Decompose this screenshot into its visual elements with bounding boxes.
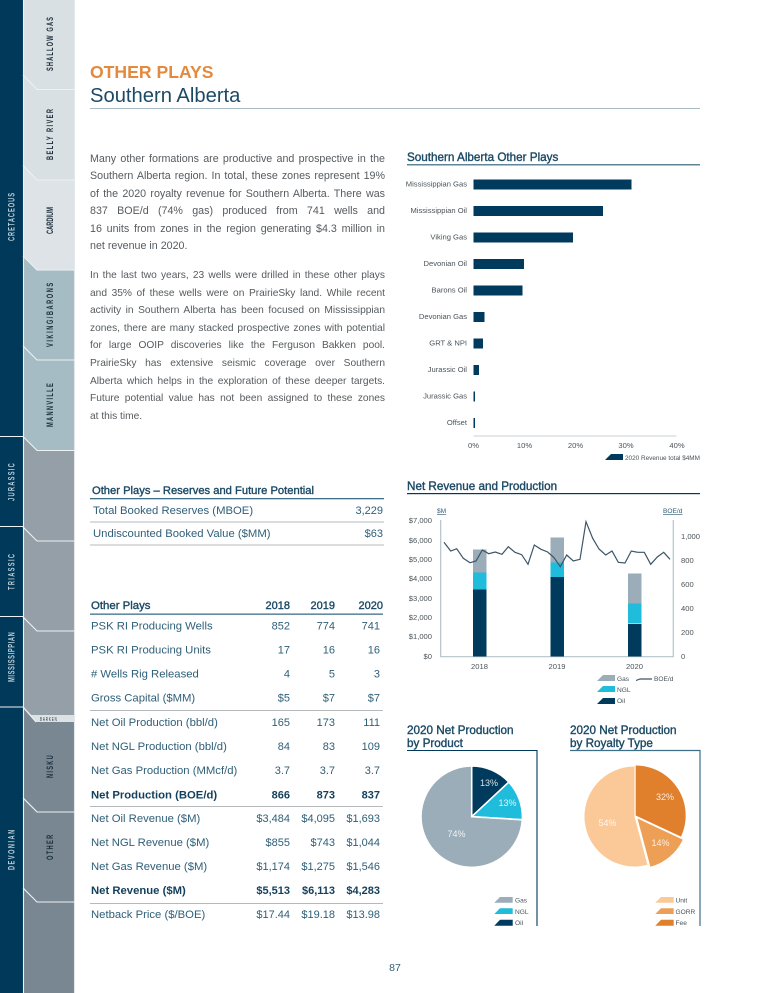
- table: Other Plays metrics 2018 to 2020: Netback Price ($/BOE): [91, 909, 205, 921]
- table: Other Plays metrics 2018 to 2020: 3: [374, 668, 380, 680]
- text block: drilling paragraph: [90, 270, 385, 422]
- combo chart: Net Revenue and Production: $2,000: [409, 613, 432, 622]
- table: Other Plays metrics 2018 to 2020: Net Gas Revenue ($M): [91, 861, 207, 873]
- table: Other Plays metrics 2018 to 2020: 83: [323, 741, 335, 753]
- combo chart: Net Revenue and Production: Oil: [617, 698, 626, 705]
- pie chart: 2020 Net Production by Royalty Type: Fee: [676, 920, 687, 927]
- table: Other Plays metrics 2018 to 2020: 837: [362, 790, 380, 802]
- combo chart: Net Revenue and Production: 400: [681, 604, 694, 613]
- pie chart: 2020 Net Production by Product: 2020 Net Production: [407, 724, 514, 737]
- table: Other Plays metrics 2018 to 2020: $5,513: [256, 885, 290, 897]
- table: Other Plays metrics 2018 to 2020: Net Gas Production (MMcf/d): [91, 765, 238, 777]
- table: Other Plays metrics 2018 to 2020: 173: [317, 717, 335, 729]
- title: Southern Alberta: [90, 85, 241, 107]
- pie chart: 2020 Net Production by Product: [407, 724, 537, 927]
- sidebar navigation: JURASSIC: [6, 463, 17, 501]
- bar chart: Southern Alberta Other Plays: 10%: [517, 441, 532, 450]
- bar chart: Southern Alberta Other Plays: Mississippian Gas: [406, 180, 467, 188]
- combo chart: Net Revenue and Production: 200: [681, 628, 694, 637]
- sidebar navigation: CARDIUM: [45, 207, 55, 234]
- table: Other Plays metrics 2018 to 2020: 84: [278, 741, 290, 753]
- text block: intro paragraph: 837 BOE/d (74% gas) produced from 741 wells and: [90, 205, 385, 217]
- combo chart: Net Revenue and Production: 0: [681, 652, 685, 661]
- text block: drilling paragraph: activity in Southern Alberta has been focused on Mississippian: [90, 305, 385, 316]
- pie chart: 2020 Net Production by Product: 74%: [447, 829, 466, 839]
- page number: 87: [389, 962, 401, 974]
- text block: drilling paragraph: and 35% of these wells were on PrairieSky land. While recent: [90, 288, 385, 299]
- table: Other Plays metrics 2018 to 2020: Net Oil Revenue ($M): [91, 813, 200, 825]
- pie chart: 2020 Net Production by Royalty Type: 14%: [651, 838, 670, 848]
- table: Other Plays metrics 2018 to 2020: 866: [272, 790, 290, 802]
- table: Other Plays metrics 2018 to 2020: $4,095: [301, 813, 335, 825]
- table: Other Plays metrics 2018 to 2020: Net NGL Production (bbl/d): [91, 741, 227, 753]
- bar chart: Southern Alberta Other Plays: Jurassic Oil: [428, 365, 467, 374]
- table: Other Plays metrics 2018 to 2020: $1,693: [346, 813, 380, 825]
- bar chart: Southern Alberta Other Plays: Viking Gas: [430, 232, 467, 242]
- text block: drilling paragraph: Future potential value has not been assigned to these zones: [90, 393, 385, 404]
- sidebar navigation: SHALLOW GAS: [45, 17, 55, 71]
- combo chart: Net Revenue and Production: 2020: [626, 662, 643, 671]
- table: Other Plays metrics 2018 to 2020: $13.98: [346, 909, 380, 921]
- pie chart: 2020 Net Production by Royalty Type: 32%: [656, 792, 674, 802]
- table: Other Plays metrics 2018 to 2020: 774: [317, 620, 335, 632]
- table: Other Plays metrics 2018 to 2020: 17: [278, 644, 290, 656]
- text block: drilling paragraph: zones, there are many stacked prospective zones with potential: [90, 323, 385, 334]
- sidebar navigation: DEVONIAN: [6, 830, 17, 870]
- combo chart: Net Revenue and Production: $0: [424, 652, 432, 661]
- table: Other Plays metrics 2018 to 2020: 873: [317, 790, 335, 802]
- table: Other Plays metrics 2018 to 2020: 4: [284, 668, 290, 680]
- bar chart: Southern Alberta Other Plays: [406, 151, 700, 462]
- table: Other Plays metrics 2018 to 2020: 109: [362, 741, 380, 753]
- table: Other Plays metrics 2018 to 2020: [90, 600, 383, 921]
- text block: drilling paragraph: for large OOIP discoveries like the Ferguson Bakken pool.: [90, 340, 385, 351]
- table: Other Plays metrics 2018 to 2020: 111: [363, 717, 380, 729]
- text block: drilling paragraph: Alberta which helps in the exploration of these deeper targets.: [90, 376, 385, 387]
- combo chart: Net Revenue and Production: [407, 480, 700, 705]
- table: Other Plays metrics 2018 to 2020: 3.7: [275, 765, 290, 777]
- text block: intro paragraph: of the 2020 royalty revenue for Southern Alberta. There was: [90, 188, 385, 200]
- bar chart: Southern Alberta Other Plays: Barons Oil: [432, 286, 467, 294]
- bar chart: Southern Alberta Other Plays: 2020 Revenue total $4MM: [625, 455, 700, 462]
- combo chart: Net Revenue and Production: $6,000: [409, 536, 432, 545]
- text block: intro paragraph: 16 units from zones in the region generating $4.3 million in: [90, 223, 385, 235]
- combo chart: Net Revenue and Production: $4,000: [409, 574, 432, 583]
- pie chart: 2020 Net Production by Royalty Type: GORR: [676, 909, 696, 916]
- sidebar navigation: MISSISSIPPIAN: [6, 632, 17, 682]
- sidebar navigation: VIKING/BARONS: [45, 283, 55, 347]
- sidebar navigation: OTHER: [45, 835, 55, 860]
- bar chart: Southern Alberta Other Plays: Offset: [447, 418, 468, 427]
- table: Other Plays metrics 2018 to 2020: Gross Capital ($MM): [91, 692, 195, 704]
- table: Other Plays metrics 2018 to 2020: Net NGL Revenue ($M): [91, 837, 209, 849]
- table: Other Plays metrics 2018 to 2020: $19.18: [301, 909, 335, 921]
- table: Other Plays metrics 2018 to 2020: $4,283: [346, 885, 380, 897]
- combo chart: Net Revenue and Production: $5,000: [409, 555, 432, 564]
- table: Other Plays metrics 2018 to 2020: Net Revenue ($M): [91, 885, 186, 897]
- text block: intro paragraph: [90, 152, 385, 252]
- table: Other Plays metrics 2018 to 2020: $1,174: [256, 861, 290, 873]
- table: Other Plays metrics 2018 to 2020: 2019: [311, 600, 335, 612]
- table: Other Plays metrics 2018 to 2020: $3,484: [256, 813, 290, 825]
- table: Other Plays metrics 2018 to 2020: 852: [272, 620, 290, 632]
- combo chart: Net Revenue and Production: BOE/d: [663, 508, 683, 515]
- table: Other Plays metrics 2018 to 2020: 2018: [266, 600, 290, 612]
- text block: intro paragraph: Southern Alberta region. In total, these zones represent 19%: [90, 170, 385, 182]
- table: Other Plays reserves and future potential: [90, 485, 384, 546]
- pie chart: 2020 Net Production by Product: 13%: [480, 778, 498, 788]
- combo chart: Net Revenue and Production: Gas: [617, 676, 630, 683]
- combo chart: Net Revenue and Production: 800: [681, 556, 694, 565]
- table: Other Plays metrics 2018 to 2020: 3.7: [365, 765, 380, 777]
- bar chart: Southern Alberta Other Plays: 40%: [669, 441, 685, 450]
- combo chart: Net Revenue and Production: 2019: [549, 662, 565, 671]
- bar chart: Southern Alberta Other Plays: Jurassic Gas: [423, 392, 467, 400]
- table: Other Plays metrics 2018 to 2020: 16: [368, 644, 380, 656]
- bar chart: Southern Alberta Other Plays: 20%: [568, 441, 583, 450]
- pie chart: 2020 Net Production by Product: Oil: [515, 920, 524, 927]
- table: Other Plays metrics 2018 to 2020: Net Oil Production (bbl/d): [91, 717, 218, 729]
- table: Other Plays reserves and future potential: Total Booked Reserves (MBOE): [93, 505, 253, 517]
- table: Other Plays metrics 2018 to 2020: $1,275: [301, 861, 335, 873]
- bar chart: Southern Alberta Other Plays: Devonian Oil: [424, 259, 467, 268]
- combo chart: Net Revenue and Production: 2018: [471, 662, 488, 671]
- table: Other Plays reserves and future potential: 3,229: [355, 505, 383, 517]
- combo chart: Net Revenue and Production: 1,000: [681, 532, 700, 541]
- table: Other Plays metrics 2018 to 2020: $1,044: [346, 837, 380, 849]
- text block: drilling paragraph: at this time.: [90, 411, 142, 422]
- title: OTHER PLAYS: [90, 62, 214, 82]
- table: Other Plays metrics 2018 to 2020: PSK RI Producing Units: [91, 644, 211, 656]
- table: Other Plays metrics 2018 to 2020: Net Production (BOE/d): [91, 790, 217, 802]
- sidebar navigation: TRIASSIC: [6, 554, 17, 590]
- combo chart: Net Revenue and Production: $1,000: [409, 632, 432, 641]
- bar chart: Southern Alberta Other Plays: 0%: [468, 441, 479, 450]
- pie chart: 2020 Net Production by Royalty Type: 54%: [598, 818, 617, 828]
- table: Other Plays metrics 2018 to 2020: $5: [278, 692, 290, 704]
- table: Other Plays metrics 2018 to 2020: # Wells Rig Released: [91, 668, 199, 680]
- text block: intro paragraph: net revenue in 2020.: [90, 240, 187, 252]
- sidebar navigation: BELLY RIVER: [45, 109, 55, 160]
- table: Other Plays metrics 2018 to 2020: $7: [323, 692, 335, 704]
- text block: intro paragraph: Many other formations are productive and prospective in the: [90, 152, 385, 164]
- table: Other Plays metrics 2018 to 2020: $855: [266, 837, 290, 849]
- sidebar navigation: [0, 0, 75, 993]
- table: Other Plays reserves and future potential: $63: [365, 528, 383, 540]
- pie chart: 2020 Net Production by Product: 13%: [498, 798, 517, 808]
- pie chart: 2020 Net Production by Royalty Type: by Royalty Type: [570, 737, 653, 750]
- table: Other Plays reserves and future potential: Undiscounted Booked Value ($MM): [93, 528, 271, 540]
- title: [90, 62, 700, 109]
- table: Other Plays metrics 2018 to 2020: 165: [272, 717, 290, 729]
- table: Other Plays metrics 2018 to 2020: 16: [323, 644, 335, 656]
- combo chart: Net Revenue and Production: 600: [681, 580, 694, 589]
- combo chart: Net Revenue and Production: Net Revenue and Production: [407, 480, 557, 493]
- table: Other Plays metrics 2018 to 2020: 3.7: [320, 765, 335, 777]
- table: Other Plays metrics 2018 to 2020: 741: [362, 620, 380, 632]
- bar chart: Southern Alberta Other Plays: Southern Alberta Other Plays: [407, 151, 559, 164]
- table: Other Plays metrics 2018 to 2020: $6,113: [302, 885, 335, 897]
- table: Other Plays metrics 2018 to 2020: 5: [329, 668, 335, 680]
- text block: drilling paragraph: In the last two years, 23 wells were drilled in these other plays: [90, 270, 385, 281]
- combo chart: Net Revenue and Production: $7,000: [409, 516, 432, 525]
- combo chart: Net Revenue and Production: BOE/d: [654, 676, 674, 683]
- sidebar navigation: BARKEN: [40, 716, 57, 722]
- table: Other Plays metrics 2018 to 2020: Other Plays: [91, 600, 151, 612]
- table: Other Plays metrics 2018 to 2020: $743: [311, 837, 335, 849]
- table: Other Plays metrics 2018 to 2020: 2020: [359, 600, 383, 612]
- table: Other Plays reserves and future potential: Other Plays – Reserves and Future Potential: [92, 485, 314, 497]
- combo chart: Net Revenue and Production: NGL: [617, 687, 631, 694]
- pie chart: 2020 Net Production by Royalty Type: Unit: [676, 898, 687, 904]
- sidebar navigation: MANNVILLE: [45, 383, 55, 427]
- bar chart: Southern Alberta Other Plays: GRT & NPI: [429, 338, 467, 348]
- table: Other Plays metrics 2018 to 2020: PSK RI Producing Wells: [91, 620, 213, 632]
- text block: drilling paragraph: PrairieSky has extensive seismic coverage over Southern: [90, 358, 385, 369]
- bar chart: Southern Alberta Other Plays: Mississippian Oil: [410, 206, 467, 215]
- combo chart: Net Revenue and Production: $M: [437, 508, 446, 515]
- sidebar navigation: CRETACEOUS: [6, 193, 17, 241]
- table: Other Plays metrics 2018 to 2020: $7: [368, 692, 380, 704]
- pie chart: 2020 Net Production by Royalty Type: [570, 724, 700, 927]
- pie chart: 2020 Net Production by Product: by Product: [407, 737, 464, 750]
- pie chart: 2020 Net Production by Product: Gas: [515, 898, 528, 904]
- bar chart: Southern Alberta Other Plays: Devonian Gas: [419, 312, 467, 321]
- table: Other Plays metrics 2018 to 2020: $1,546: [346, 861, 380, 873]
- sidebar navigation: NISKU: [45, 755, 55, 778]
- pie chart: 2020 Net Production by Product: NGL: [515, 909, 529, 916]
- bar chart: Southern Alberta Other Plays: 30%: [618, 441, 634, 450]
- pie chart: 2020 Net Production by Royalty Type: 2020 Net Production: [570, 724, 677, 737]
- table: Other Plays metrics 2018 to 2020: $17.44: [256, 909, 290, 921]
- combo chart: Net Revenue and Production: $3,000: [409, 594, 432, 603]
